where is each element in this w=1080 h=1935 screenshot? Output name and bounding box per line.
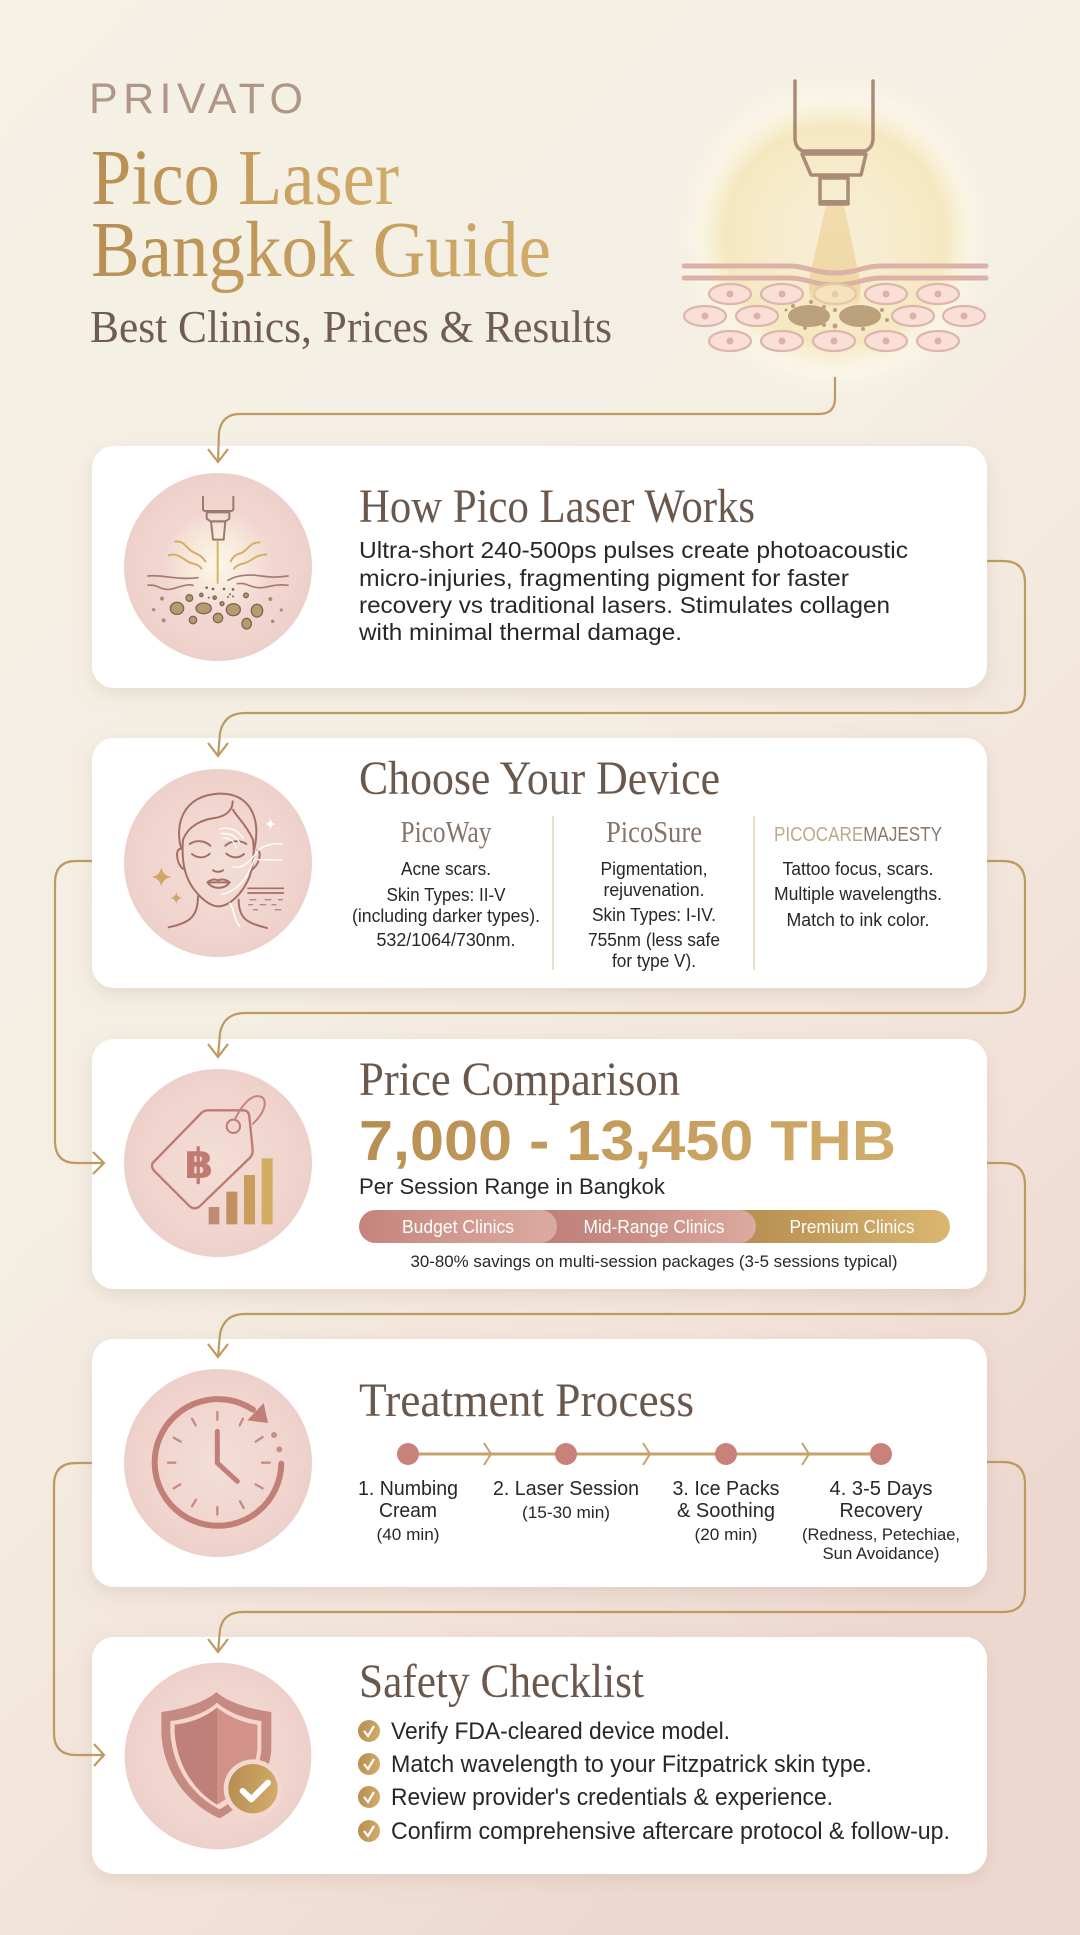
tier bar: Budget Clinics	[402, 1217, 514, 1237]
heading: Safety Checklist	[359, 1655, 645, 1708]
checklist item 1: Verify FDA-cleared device model.	[391, 1718, 730, 1745]
price range: 7,000 - 13,450 THB	[359, 1109, 896, 1173]
arrow: device to price	[208, 861, 1025, 1057]
heading: How Pico Laser Works	[359, 480, 755, 533]
checklist item 4: Confirm comprehensive aftercare protocol & follow-up.	[391, 1818, 950, 1845]
card background	[92, 738, 987, 988]
card background	[92, 1039, 987, 1289]
step 2	[493, 1478, 639, 1522]
column: PicoSure	[588, 814, 720, 971]
step 2: (15-30 min)	[522, 1503, 610, 1522]
arrow: treatment left side to safety icon	[54, 1463, 104, 1766]
body text: Ultra-short 240-500ps pulses create photoacoustic	[359, 537, 908, 563]
panel: treatment process	[92, 1339, 987, 1587]
step 3: & Soothing	[677, 1500, 775, 1522]
step 1: Cream	[379, 1500, 437, 1522]
arrow: how it works to device	[208, 561, 1025, 756]
price caption: Per Session Range in Bangkok	[359, 1174, 666, 1199]
column: PicoCare Majesty: PICOCAREMAJESTY	[774, 824, 942, 846]
body text: recovery vs traditional lasers. Stimulates collagen	[359, 592, 890, 618]
step 1: (40 min)	[376, 1525, 440, 1544]
column: PicoSure: Skin Types: I-IV.	[592, 905, 716, 925]
column: PicoWay: PicoWay	[400, 814, 492, 849]
column: PicoCare Majesty: Multiple wavelengths.	[774, 884, 942, 904]
column: PicoSure: Pigmentation,	[600, 859, 708, 879]
icon: price tag with bars	[124, 1069, 312, 1257]
column: PicoSure: rejuvenation.	[604, 880, 704, 900]
body text	[358, 537, 908, 645]
brand name: PRIVATO	[89, 75, 303, 123]
icon: shield with check	[125, 1663, 311, 1849]
arrow: price to treatment	[208, 1163, 1025, 1357]
card background	[92, 446, 987, 688]
icon: face with sparkles	[124, 769, 312, 957]
panel: price comparison	[92, 1039, 987, 1289]
icon: clock	[124, 1369, 312, 1557]
hero illustration: laser handpiece on skin	[669, 63, 1001, 407]
column: PicoSure: 755nm (less safe	[588, 930, 720, 950]
tier bar: Premium Clinics	[790, 1217, 914, 1237]
column: PicoWay: Acne scars.	[401, 859, 491, 879]
checklist item 2: Match wavelength to your Fitzpatrick skin type.	[391, 1751, 872, 1778]
timeline	[397, 1443, 892, 1465]
arrow: device left side to price icon	[55, 861, 104, 1174]
step 4: (Redness, Petechiae,	[802, 1525, 960, 1544]
arrow: treatment to safety	[208, 1462, 1025, 1652]
savings note: 30-80% savings on multi-session packages (3-5 sessions typical)	[410, 1252, 898, 1271]
title line 2: Bangkok Guide	[91, 207, 551, 294]
heading: Treatment Process	[359, 1374, 694, 1427]
tier bar	[359, 1210, 950, 1243]
step 1: 1. Numbing	[358, 1478, 458, 1500]
column: PicoSure: PicoSure	[606, 814, 702, 849]
column: PicoSure: for type V).	[612, 951, 696, 971]
step 3: (20 min)	[694, 1525, 758, 1544]
heading: Price Comparison	[359, 1053, 680, 1106]
subtitle: Best Clinics, Prices & Results	[90, 301, 612, 352]
column: PicoWay: (including darker types).	[352, 906, 540, 926]
card background	[92, 1339, 987, 1587]
panel: choose your device	[92, 738, 987, 988]
tier bar: Mid-Range Clinics	[584, 1217, 724, 1237]
step 3: 3. Ice Packs	[672, 1478, 780, 1500]
body text: micro-injuries, fragmenting pigment for faster	[359, 565, 849, 591]
card background	[92, 1637, 987, 1874]
icon: laser on skin	[124, 473, 312, 661]
title line 1: Pico Laser	[91, 135, 399, 222]
column: PicoWay: Skin Types: II-V	[386, 885, 506, 905]
header: brand and title	[89, 75, 612, 352]
step 4: Sun Avoidance)	[822, 1544, 940, 1563]
column: PicoCare Majesty: Match to ink color.	[786, 910, 930, 930]
panel: how pico laser works	[92, 446, 987, 688]
body text: with minimal thermal damage.	[358, 619, 682, 645]
panel: safety checklist	[92, 1637, 987, 1874]
step 2: 2. Laser Session	[493, 1478, 639, 1500]
icon: price tag with bars: ฿	[184, 1139, 213, 1188]
step 4: 4. 3-5 Days	[830, 1478, 932, 1500]
column: PicoCare Majesty: Tattoo focus, scars.	[782, 859, 934, 879]
column: PicoWay: 532/1064/730nm.	[376, 930, 516, 950]
column: PicoWay	[352, 814, 540, 950]
step 3	[672, 1478, 780, 1544]
arrow: header to how it works	[208, 377, 835, 462]
step 4: Recovery	[840, 1500, 922, 1522]
step 4	[802, 1478, 960, 1563]
step 1	[358, 1478, 458, 1544]
column: PicoCare Majesty	[774, 824, 942, 930]
checklist item 3: Review provider's credentials & experience.	[391, 1784, 833, 1811]
heading: Choose Your Device	[359, 752, 720, 805]
